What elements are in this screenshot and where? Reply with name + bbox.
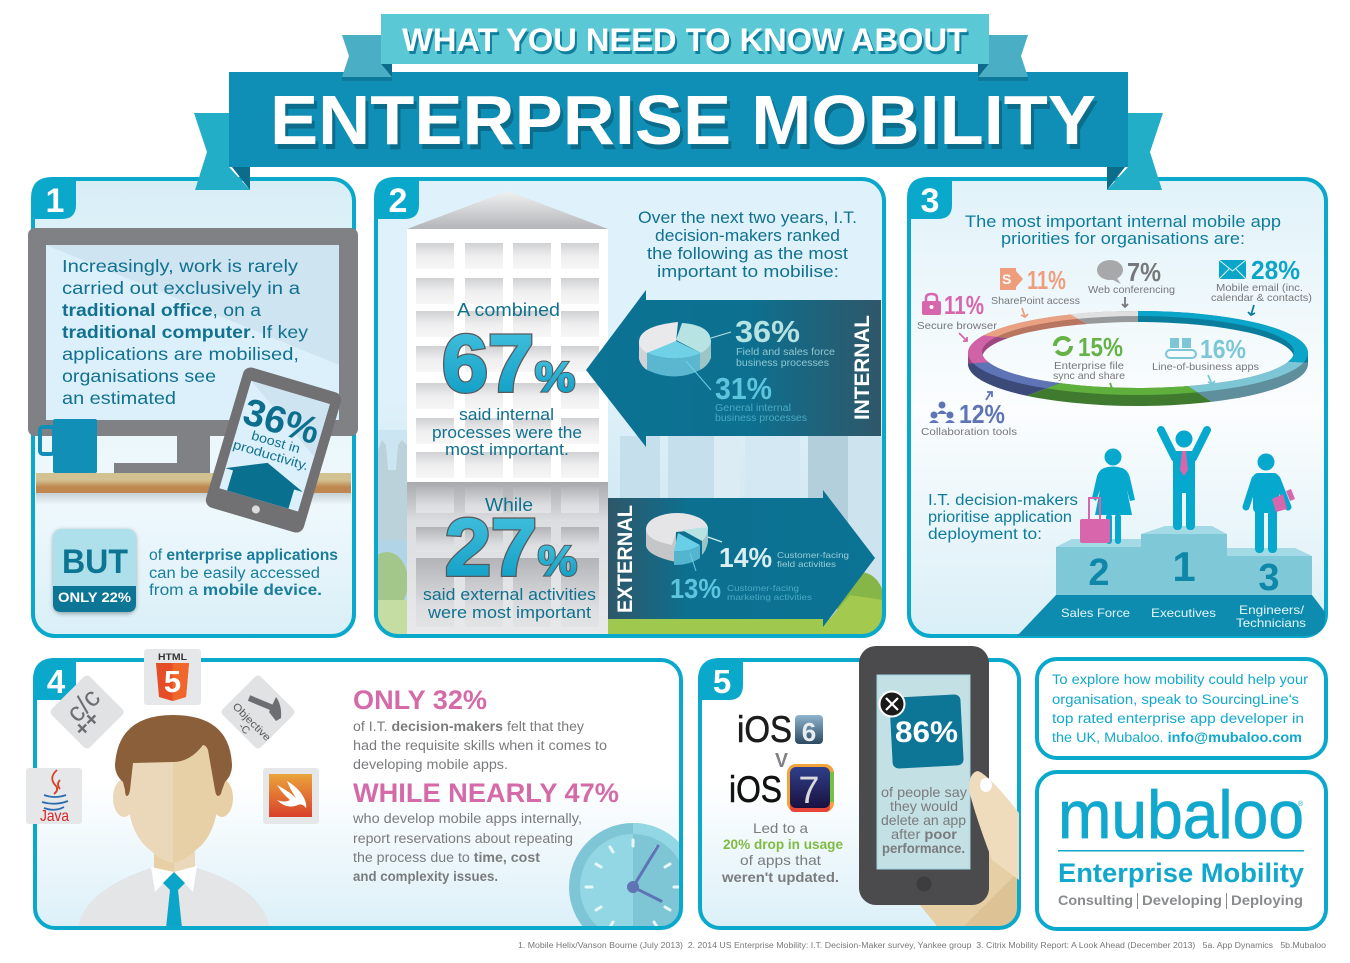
phone: of people say — [881, 784, 967, 800]
podium text: prioritise application — [928, 509, 1072, 526]
podium text: deployment to: — [928, 526, 1042, 543]
arrow: internal — [586, 290, 881, 447]
clock — [569, 823, 679, 926]
stat: secure browser — [917, 290, 998, 341]
67% stat: 67 — [442, 319, 534, 409]
27% stat — [423, 495, 596, 622]
text: led to a 20% drop: Led to a — [753, 820, 808, 836]
tablet: boost in — [250, 428, 302, 456]
iOS logos: V — [775, 750, 789, 772]
icon: Java — [26, 768, 82, 825]
27% stat: While — [485, 495, 533, 515]
phone: performance. — [882, 840, 965, 856]
stat: web conferencing: Web conferencing — [1088, 284, 1175, 296]
badge text: can be easily accessed — [149, 565, 320, 582]
phone: they would — [890, 798, 958, 814]
heading: The most important internal mobile app — [965, 213, 1281, 231]
podium: Executives — [1151, 606, 1216, 620]
panel 5: iOS — [698, 646, 1020, 930]
text: while nearly 47%: WHILE NEARLY 47% — [353, 778, 619, 808]
icon: HTML5 — [144, 649, 201, 705]
stat: web conferencing: 7% — [1127, 257, 1161, 287]
figure: sales woman — [1080, 448, 1135, 544]
arrow: internal: business processes — [736, 358, 829, 369]
ribbon tails small — [342, 35, 1028, 81]
callout: contact — [1037, 659, 1326, 758]
logo panel: Mubaloo — [1037, 772, 1326, 929]
stat: line of business: Line-of-business apps — [1152, 361, 1259, 373]
pie chart: external — [646, 513, 722, 571]
intro text: Over the next two years, I.T. — [638, 209, 857, 227]
67% stat: A combined — [457, 300, 560, 320]
desk — [36, 473, 351, 505]
27% stat: said external activities — [423, 585, 596, 604]
phone — [859, 646, 989, 905]
BUT badge: ONLY 22% — [58, 589, 132, 605]
stat: enterprise file sync: 15% — [1078, 332, 1123, 362]
arrow: external: Customer-facing — [777, 550, 849, 560]
stat: collaboration: Collaboration tools — [921, 426, 1017, 438]
stat: secure browser: 11% — [944, 290, 984, 320]
badge text: from a mobile device. — [149, 582, 322, 599]
callout: contact: top rated enterprise app developer in — [1052, 711, 1304, 726]
67% stat: % — [535, 353, 575, 400]
badge text: of enterprise applications — [149, 547, 338, 564]
27% stat: % — [538, 537, 577, 584]
man illustration — [78, 715, 270, 928]
monitor text: traditional computer . If key — [62, 322, 308, 342]
callout: contact: the UK, Mubaloo. info@mubaloo.com — [1052, 730, 1302, 745]
icon: C/C++: ++ — [69, 706, 105, 742]
main ribbon — [229, 72, 1128, 167]
monitor text: applications are mobilised, — [62, 344, 299, 364]
icon: C/C++ — [49, 674, 125, 750]
number tab 2: 2 — [389, 182, 407, 220]
stat: collaboration: 12% — [959, 399, 1005, 429]
monitor text: traditional office , on a — [62, 300, 261, 320]
icon: Swift — [263, 768, 319, 824]
logo panel: Mubaloo: ® — [1298, 800, 1304, 808]
heading — [965, 213, 1281, 248]
number tab 3 — [907, 177, 952, 220]
podium: 1 — [1172, 543, 1196, 590]
arrow: external: marketing activities — [727, 592, 812, 602]
arrow: internal: 31% — [715, 371, 772, 406]
text: only 32%: developing mobile apps. — [353, 757, 508, 772]
main heading: ENTERPRISE MOBILITY — [273, 86, 1099, 164]
icon: Objective-C: -C — [236, 721, 252, 737]
footer sources: 1. Mobile Helix/Vanson Bourne (July 2013) 2. 2014 US Enterprise Mobility: I.T. Decision-Maker survey, Yankee group 3. Citrix Mobility Report: A Look Ahead (December 2013) 5a. App Dynamics 5b.Mubaloo — [518, 941, 1327, 950]
hand — [920, 852, 1017, 926]
number tab 5: 5 — [713, 663, 731, 700]
callout: contact: To explore how mobility could help your — [1052, 672, 1309, 687]
panel 3: priorities — [907, 177, 1326, 636]
heading: priorities for organisations are: — [1001, 230, 1245, 248]
monitor text: organisations see — [62, 366, 216, 386]
logo panel: Mubaloo: mubaloo — [1058, 777, 1304, 853]
BUT badge: BUT — [62, 543, 128, 581]
stat: mobile email: 28% — [1251, 255, 1300, 285]
podium text: I.T. decision-makers — [928, 492, 1078, 509]
arrow: external — [608, 490, 875, 627]
stat: enterprise file sync — [1053, 332, 1125, 391]
iOS logos: iOS — [729, 769, 782, 810]
tablet: 36% — [238, 391, 324, 453]
number tab 4: 4 — [47, 663, 66, 700]
intro text — [638, 209, 857, 281]
podium: Technicians — [1236, 616, 1306, 630]
iOS logos: iOS — [737, 709, 792, 750]
badge text — [149, 547, 338, 599]
monitor text: an estimated — [62, 388, 176, 408]
text: while nearly 47%: report reservations about repeating — [353, 831, 573, 846]
title banner — [194, 14, 1163, 190]
podium: Engineers/ — [1239, 603, 1305, 617]
67% stat: said internal — [459, 405, 554, 424]
arrow: external: 14% — [719, 542, 772, 573]
67% stat — [432, 300, 582, 459]
27% stat: 27 — [445, 503, 537, 593]
icon: HTML5: 5 — [164, 664, 181, 699]
number tab 5 — [698, 658, 743, 700]
stat: mobile email — [1211, 255, 1312, 315]
text: only 32%: had the requisite skills when it comes to — [353, 738, 607, 753]
icon: C/C++: c/c — [60, 682, 106, 728]
stat: SharePoint: 11% — [1027, 265, 1066, 295]
arrow: external: field activities — [777, 559, 836, 569]
phone: after poor — [891, 826, 958, 842]
building — [407, 191, 608, 636]
text: only 32%: of I.T. decision-makers felt that they — [353, 719, 584, 734]
text: while nearly 47%: and complexity issues. — [353, 869, 498, 884]
stat: SharePoint: S — [1002, 271, 1011, 287]
arrow: internal: business processes — [715, 413, 807, 424]
27% stat: were most important — [427, 603, 591, 622]
kicker heading: WHAT YOU NEED TO KNOW ABOUT — [404, 25, 969, 61]
stat: secure browser: Secure browser — [917, 320, 998, 332]
number tab 1 — [31, 177, 76, 220]
arrow: internal: INTERNAL — [851, 315, 874, 420]
figure: executive — [1161, 430, 1207, 530]
number tab 1: 1 — [46, 182, 64, 220]
icon: close badge — [880, 692, 904, 716]
thumb — [969, 771, 1019, 880]
text: only 32%: ONLY 32% — [353, 685, 487, 715]
podium — [1017, 526, 1325, 636]
main heading: ENTERPRISE MOBILITY — [270, 81, 1096, 159]
phone: delete an app — [881, 812, 966, 828]
monitor text: carried out exclusively in a — [62, 278, 300, 298]
iOS logos — [729, 709, 834, 812]
ring chart — [968, 311, 1308, 406]
67% stat: 67 — [442, 319, 534, 409]
number tab 2 — [374, 177, 419, 220]
27% stat: % — [538, 537, 577, 584]
monitor — [28, 228, 358, 473]
arrow: internal: 36% — [735, 314, 800, 349]
stat: enterprise file sync: Enterprise file — [1054, 360, 1124, 372]
icon: HTML5: HTML — [158, 652, 188, 662]
67% stat: most important. — [445, 440, 569, 459]
kicker heading: WHAT YOU NEED TO KNOW ABOUT — [402, 22, 967, 58]
iOS logos: 7 — [798, 770, 820, 812]
icon: Objective-C — [220, 674, 296, 750]
text: while nearly 47%: who develop mobile apps internally, — [352, 811, 582, 826]
logo panel: Mubaloo: Developing — [1142, 892, 1222, 908]
arrow: external: EXTERNAL — [614, 505, 637, 613]
67% stat: % — [535, 353, 575, 400]
arrow: internal: General internal — [715, 403, 791, 414]
stat: line of business: 16% — [1200, 334, 1246, 364]
icon: Objective-C: Objective — [230, 701, 273, 744]
podium: 3 — [1258, 557, 1280, 599]
stat: mobile email: calendar & contacts) — [1211, 292, 1312, 304]
text: while nearly 47% — [352, 778, 619, 884]
intro text: the following as the most — [647, 245, 848, 263]
top ribbon — [381, 14, 989, 64]
tablet: productivity. — [231, 437, 311, 473]
monitor text: Increasingly, work is rarely — [62, 256, 298, 276]
stat: SharePoint — [991, 265, 1080, 317]
tablet — [204, 366, 343, 534]
number tab 3: 3 — [921, 182, 939, 220]
podium text — [928, 492, 1078, 543]
text: led to a 20% drop: of apps that — [740, 852, 821, 868]
text: led to a 20% drop: 20% drop in usage — [723, 836, 843, 852]
iOS logos: 6 — [802, 717, 816, 747]
logo panel: Mubaloo: Deploying — [1231, 892, 1303, 908]
text: led to a 20% drop: weren't updated. — [721, 869, 839, 885]
panel 2: internal vs external — [366, 177, 884, 640]
monitor text — [62, 256, 308, 408]
intro text: decision-makers ranked — [655, 227, 840, 245]
stat: collaboration — [921, 392, 1017, 438]
67% stat: processes were the — [432, 423, 582, 442]
pie chart: internal — [639, 322, 731, 390]
intro text: important to mobilise: — [657, 263, 839, 281]
stat: enterprise file sync: sync and share — [1053, 370, 1125, 382]
podium: 2 — [1088, 552, 1110, 594]
stat: line of business — [1152, 334, 1259, 384]
callout: contact: organisation, speak to SourcingLine's — [1052, 692, 1299, 707]
number tab 4 — [33, 658, 76, 700]
86% tile: 86% — [895, 716, 958, 749]
panel 1: productivity — [28, 177, 358, 636]
arrow: external: Customer-facing — [727, 583, 799, 593]
icon: mug — [40, 419, 97, 473]
stat: SharePoint: SharePoint access — [991, 295, 1080, 307]
text: while nearly 47%: the process due to time, cost — [353, 850, 541, 865]
BUT badge — [53, 529, 136, 614]
city background — [378, 430, 882, 634]
text: led to a 20% drop — [721, 820, 843, 885]
27% stat: 27 — [445, 503, 537, 593]
stat: mobile email: Mobile email (inc. — [1216, 282, 1303, 294]
icon: Java: Java — [40, 808, 69, 825]
arrow: internal: Field and sales force — [736, 347, 835, 358]
podium: Sales Force — [1061, 606, 1130, 620]
ribbon tails large — [194, 113, 1163, 190]
arrow: external: 13% — [670, 573, 721, 604]
figure: engineer — [1246, 454, 1295, 553]
text: only 32% — [353, 685, 607, 772]
86% tile — [889, 694, 964, 769]
panel 4: skills — [26, 649, 697, 951]
stat: web conferencing — [1088, 257, 1175, 307]
logo panel: Mubaloo: Enterprise Mobility — [1058, 858, 1304, 888]
logo panel: Mubaloo: Consulting — [1058, 892, 1133, 908]
